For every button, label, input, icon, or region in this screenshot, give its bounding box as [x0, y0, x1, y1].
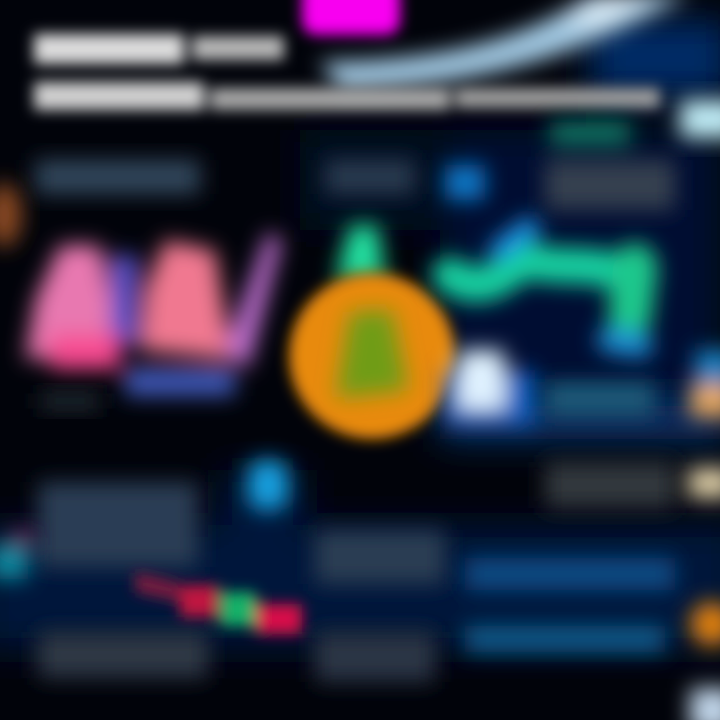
right edge icons — [688, 350, 720, 720]
segmented red green bar — [135, 572, 302, 634]
right text block — [545, 382, 675, 508]
left edge teal accent — [0, 530, 34, 579]
left edge orange icon — [0, 183, 22, 247]
lower left text block — [38, 482, 208, 678]
top right accents — [445, 122, 675, 210]
blue accent icon — [248, 460, 288, 510]
title — [34, 34, 660, 110]
left subheading — [35, 160, 200, 194]
decorative swoosh — [320, 0, 690, 90]
white highlight beside circle — [445, 350, 535, 425]
icon: green shape in circle — [336, 310, 408, 398]
line chart: green wave — [450, 228, 640, 345]
icon group: pink figures — [25, 232, 282, 396]
lower middle text block — [315, 530, 445, 682]
central orange circle — [289, 273, 455, 439]
central teal accent — [335, 225, 385, 280]
decorative top right highlight — [680, 100, 720, 138]
decorative magenta blob — [302, 0, 400, 35]
lower right bars — [465, 558, 675, 652]
middle top subheading — [325, 160, 415, 194]
left caption — [40, 392, 100, 410]
